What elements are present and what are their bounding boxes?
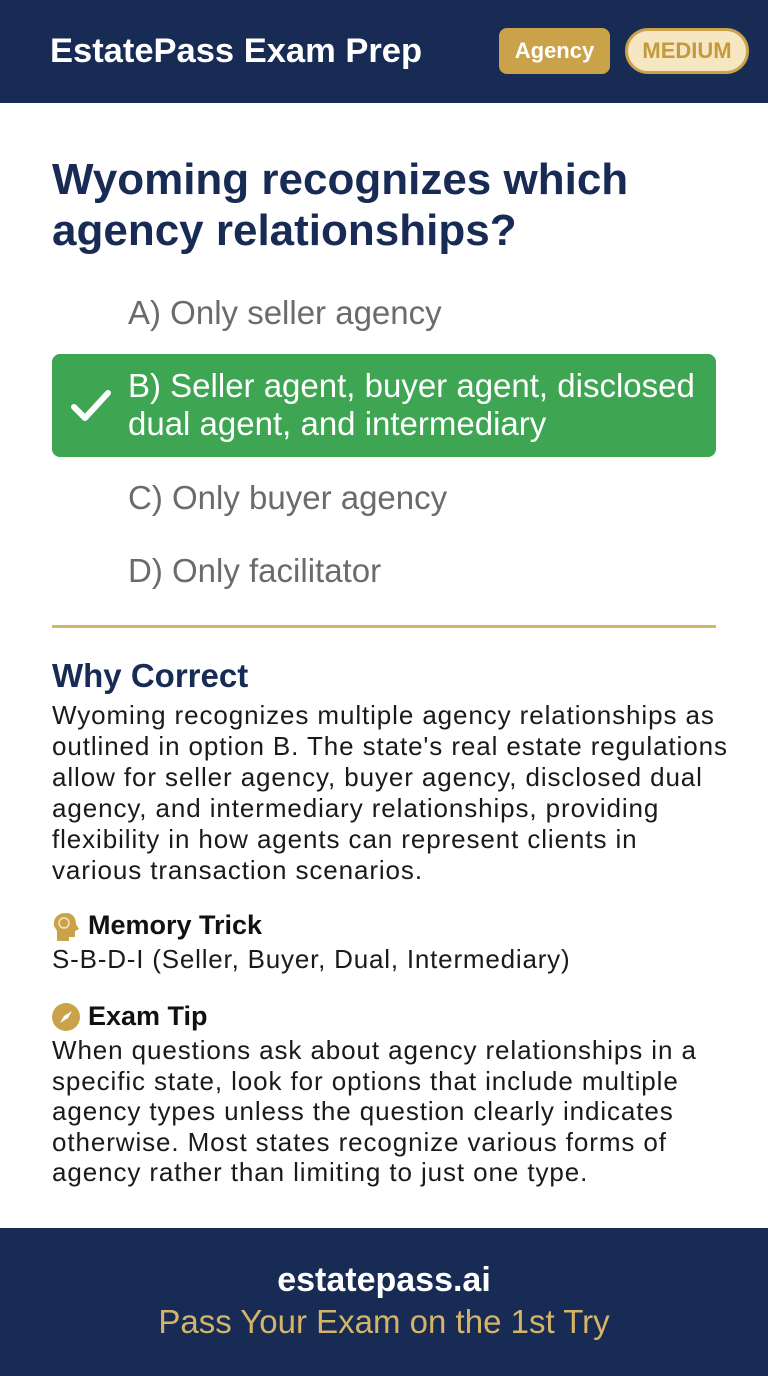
icon: compass [52,1003,80,1031]
question title [52,155,628,255]
exam tip section [52,1001,697,1187]
option B text: B) Seller agent, buyer agent, disclosed [128,367,695,404]
heading: Memory Trick: Memory Trick [88,910,262,940]
icon: brain head [54,913,79,941]
footer [0,1228,768,1376]
badge: MEDIUM: MEDIUM [642,38,732,63]
option B correct [52,354,716,457]
icon: checkmark [71,390,111,421]
header title: EstatePass Exam Prep [50,32,422,70]
explanation text: allow for seller agency, buyer agency, disclosed dual [52,762,703,792]
exam tip text: When questions ask about agency relationships in a [52,1035,697,1065]
question title: Wyoming recognizes which [52,155,628,204]
exam tip text [52,1035,697,1187]
heading: Exam Tip: Exam Tip [88,1001,208,1031]
badge: Agency: Agency [515,38,594,63]
option C: C) Only buyer agency [128,479,447,516]
memory trick section [52,910,570,974]
option B text [128,367,695,442]
explanation text: outlined in option B. The state's real estate regulations [52,731,728,761]
option A: A) Only seller agency [128,294,442,331]
exam tip text: agency rather than limiting to just one type. [52,1157,588,1187]
explanation text: agency, and intermediary relationships, providing [52,793,659,823]
footer tagline: Pass Your Exam on the 1st Try [158,1303,610,1340]
explanation text: Wyoming recognizes multiple agency relationships as [52,700,715,730]
option B text: dual agent, and intermediary [128,405,546,442]
header bar [0,0,768,103]
exam tip text: specific state, look for options that include multiple [52,1066,679,1096]
footer url: estatepass.ai [277,1261,491,1299]
badge: MEDIUM [625,28,749,74]
explanation text: flexibility in how agents can represent clients in [52,824,638,854]
explanation text [52,700,728,885]
exam tip text: agency types unless the question clearly indicates [52,1096,674,1126]
memory trick text: S-B-D-I (Seller, Buyer, Dual, Intermediary) [52,944,570,974]
explanation text: various transaction scenarios. [52,855,423,885]
exam tip text: otherwise. Most states recognize various forms of [52,1126,667,1156]
heading: Why Correct: Why Correct [52,657,248,694]
question title: agency relationships? [52,206,517,255]
option D: D) Only facilitator [128,552,381,589]
badge: Agency [499,28,610,74]
